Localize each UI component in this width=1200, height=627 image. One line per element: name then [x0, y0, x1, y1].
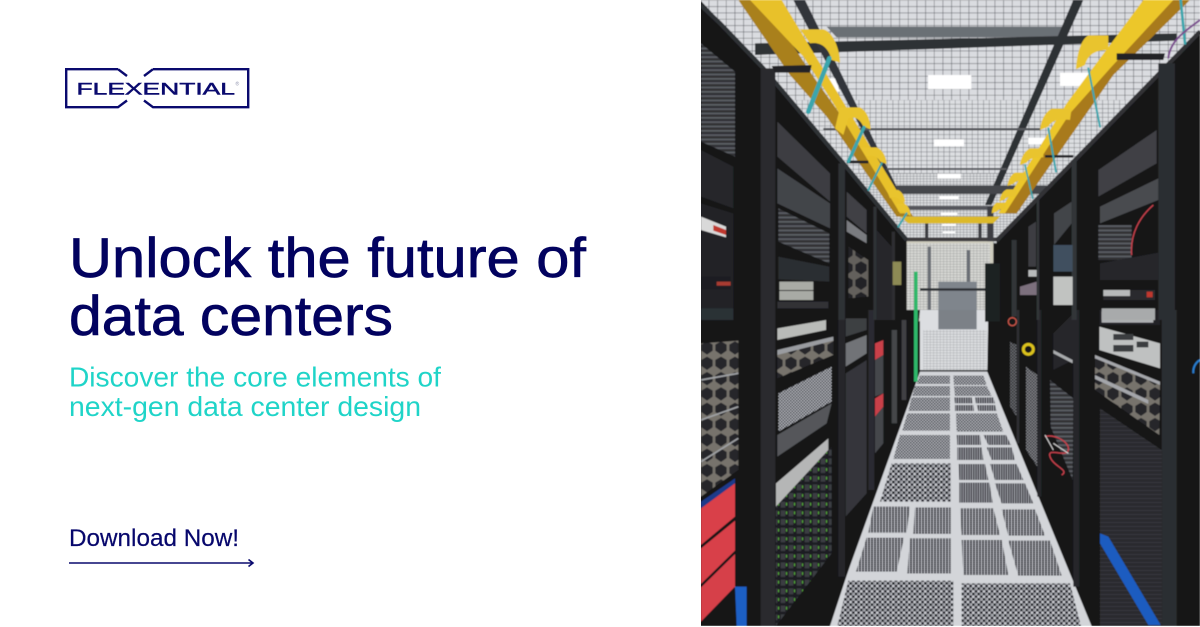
logo registered mark: ® [236, 80, 240, 88]
back of aisle [903, 241, 993, 321]
logo frame [66, 69, 248, 107]
subheading [69, 362, 441, 422]
floor [828, 372, 1092, 626]
subheading: next-gen data center design [69, 391, 421, 422]
yellow cable trays [738, 0, 1200, 227]
teal fiber cables [808, 0, 1185, 227]
black tray arms [772, 53, 1165, 163]
tray brackets [800, 29, 1108, 216]
left server racks [700, 0, 920, 626]
heading [69, 226, 586, 347]
logo: Flexential [66, 69, 248, 107]
ceiling [700, 0, 1200, 263]
floor tiles [837, 376, 1081, 626]
heading: Unlock the future of [69, 226, 586, 289]
right server racks [985, 30, 1200, 626]
ceiling lights [827, 73, 1094, 233]
logo wordmark: FLEXENTIAL [76, 79, 235, 98]
photo: data center aisle [700, 0, 1200, 626]
arrow [69, 560, 253, 566]
ceiling beams [755, 0, 1177, 263]
call to action: Download Now! [69, 525, 239, 552]
heading: data centers [69, 284, 393, 347]
subheading: Discover the core elements of [69, 362, 441, 392]
